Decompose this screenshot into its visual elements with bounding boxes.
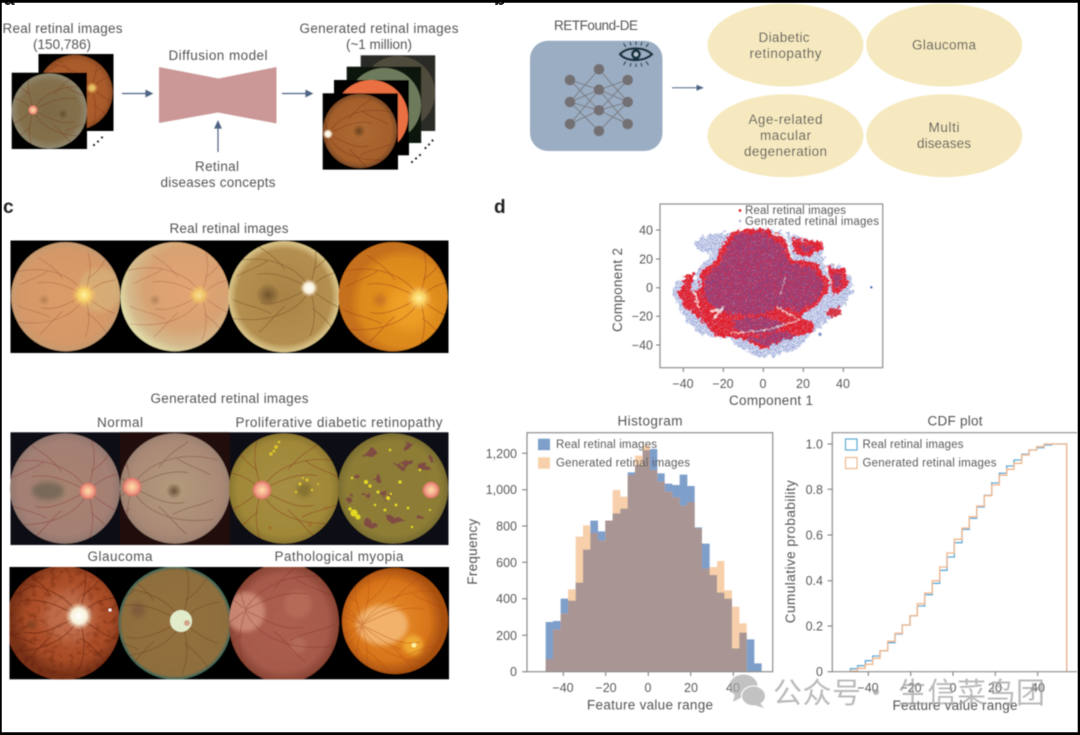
watermark text: 公众号· 生信菜鸟团 — [773, 670, 1045, 712]
plot frame — [527, 433, 773, 672]
x-axis labels: 20 — [988, 681, 1002, 695]
disease: multi diseases: Multi — [928, 120, 960, 135]
x-axis labels: 20 — [796, 377, 810, 391]
legend — [846, 439, 997, 470]
panel a: diffusion model pipeline: (150,786) — [33, 37, 91, 52]
panel a: diffusion model pipeline: diseases concepts — [160, 175, 276, 190]
heading: generated retinal images: Generated retinal images — [150, 391, 309, 406]
stack of real retinal images — [10, 53, 114, 150]
y-axis labels: 0.2 — [806, 620, 823, 634]
y-axis labels: 1,200 — [486, 447, 517, 461]
label: proliferative diabetic retinopathy: Proliferative diabetic retinopathy — [236, 415, 443, 430]
x-axis labels: 0 — [645, 681, 652, 695]
axis title: feature value range: Feature value range — [587, 698, 713, 712]
panel b: RETFound-DE classification — [530, 4, 1022, 177]
axis title: component 1: Component 1 — [729, 393, 813, 408]
heading: generated retinal images count: Generated retinal images — [300, 21, 459, 36]
image strip: glaucoma and pathological myopia — [8, 566, 450, 680]
icon: neural network — [565, 64, 633, 136]
legend: Real retinal images — [862, 439, 964, 451]
x-axis labels: −20 — [595, 681, 617, 695]
x-axis labels: 0 — [950, 681, 957, 695]
disease: age-related macular degeneration: macular — [760, 128, 812, 143]
disease: glaucoma — [866, 4, 1022, 86]
legend: Generated retinal images — [862, 458, 997, 470]
heading: histogram: Histogram — [618, 414, 682, 428]
x-axis labels: −40 — [672, 377, 694, 391]
watermark: WeChat account name — [730, 670, 1045, 712]
legend: Generated retinal images — [556, 458, 690, 470]
y-axis labels: −20 — [632, 310, 653, 324]
panel letter c: c — [3, 197, 14, 218]
y-axis labels: 1,000 — [486, 483, 517, 497]
x-axis labels — [857, 682, 1046, 693]
y-axis labels: 800 — [496, 520, 517, 534]
heading: RETFound-DE: RETFound-DE — [554, 18, 638, 33]
diffusion model shape — [159, 67, 276, 124]
disease: age-related macular degeneration — [708, 94, 864, 177]
histogram bars — [546, 446, 762, 672]
arrow: concepts into diffusion model — [215, 122, 221, 152]
x-axis labels: −20 — [712, 377, 734, 391]
label: retinal diseases concepts: Retinal — [195, 159, 239, 174]
disease: diabetic retinopathy: Diabetic — [758, 30, 810, 45]
x-axis labels: −20 — [900, 681, 922, 695]
scatter point clouds — [674, 228, 872, 358]
label: glaucoma: Glaucoma — [88, 549, 153, 564]
heading: CDF plot: CDF plot — [928, 414, 983, 428]
x-axis labels — [552, 681, 740, 695]
plot frame — [660, 204, 883, 368]
panel a: diffusion model pipeline: (~1 million) — [346, 37, 412, 52]
y-axis labels: 0.6 — [806, 528, 823, 542]
panel c: real retinal images — [10, 221, 454, 353]
axis ticks — [656, 230, 843, 372]
y-axis labels: 0 — [510, 665, 517, 679]
arrow: diffusion model to generated images — [282, 90, 312, 96]
legend — [538, 439, 690, 470]
y-axis labels: 0 — [646, 281, 653, 295]
axis ticks — [522, 453, 733, 676]
icon: eye — [620, 42, 652, 67]
y-axis labels: 400 — [496, 592, 517, 606]
axis title: cumulative probability: Cumulative probability — [783, 480, 798, 623]
disease: multi diseases — [866, 94, 1022, 177]
legend: Real retinal images — [556, 439, 657, 451]
y-axis labels: 40 — [639, 224, 653, 238]
x-axis labels: 0 — [760, 377, 767, 391]
disease: multi diseases: diseases — [917, 136, 971, 151]
heading: diffusion model: Diffusion model — [168, 48, 268, 63]
x-axis labels — [672, 377, 850, 391]
y-axis labels: 20 — [639, 252, 653, 266]
y-axis labels — [486, 447, 517, 679]
heading: real retinal images count: Real retinal images — [2, 21, 123, 36]
y-axis labels: 1.0 — [806, 438, 823, 452]
label: normal: Normal — [97, 415, 143, 430]
arrow: real images to diffusion model — [122, 90, 152, 96]
icon: WeChat bubbles — [730, 674, 766, 708]
disease: diabetic retinopathy — [708, 4, 864, 86]
disease: age-related macular degeneration: degeneration — [744, 144, 827, 159]
axis title: feature value range: Feature value range — [892, 698, 1018, 713]
panel a: diffusion model pipeline — [2, 21, 459, 190]
panel c: generated retinal images — [0, 391, 457, 683]
y-axis labels: 0 — [816, 665, 823, 679]
network box — [530, 41, 662, 151]
label: pathological myopia: Pathological myopia — [274, 549, 404, 564]
x-axis labels: 20 — [684, 681, 698, 695]
image strip: real fundus photographs — [10, 240, 454, 353]
legend: Generated retinal images — [745, 216, 879, 228]
heading: real retinal images: Real retinal images — [170, 221, 289, 236]
plot frame — [832, 433, 1078, 672]
legend — [739, 205, 879, 228]
disease: age-related macular degeneration: Age-related — [748, 112, 822, 127]
axis title: component 2: Component 2 — [610, 248, 625, 332]
x-axis labels: −40 — [552, 681, 574, 695]
disease: glaucoma: Glaucoma — [912, 38, 976, 52]
image strip: normal and proliferative diabetic retinopathy — [2, 432, 448, 545]
stack of generated retinal images — [322, 54, 436, 170]
disease: diabetic retinopathy: retinopathy — [750, 46, 822, 61]
panel d: CDF plot — [783, 414, 1078, 713]
y-axis labels: 600 — [496, 556, 517, 570]
y-axis labels: 200 — [496, 629, 517, 643]
y-axis labels: 0.4 — [806, 574, 823, 588]
x-axis labels: 40 — [726, 681, 740, 695]
y-axis labels — [806, 438, 823, 679]
panel letter d: d — [494, 197, 506, 218]
CDF step curves — [850, 444, 1067, 672]
arrow: network to diseases — [672, 86, 702, 90]
panel d: histogram — [465, 414, 773, 712]
x-axis labels: 40 — [1031, 681, 1045, 695]
x-axis labels: −40 — [857, 681, 879, 695]
axis title: frequency: Frequency — [465, 518, 480, 585]
y-axis labels: −40 — [632, 338, 653, 352]
x-axis labels: 40 — [836, 377, 850, 391]
y-axis labels — [632, 224, 653, 352]
legend: Real retinal images — [745, 205, 846, 217]
panel d: t-SNE scatter plot — [610, 204, 883, 408]
y-axis labels: 0.8 — [806, 483, 823, 497]
axis ticks — [828, 444, 1038, 676]
